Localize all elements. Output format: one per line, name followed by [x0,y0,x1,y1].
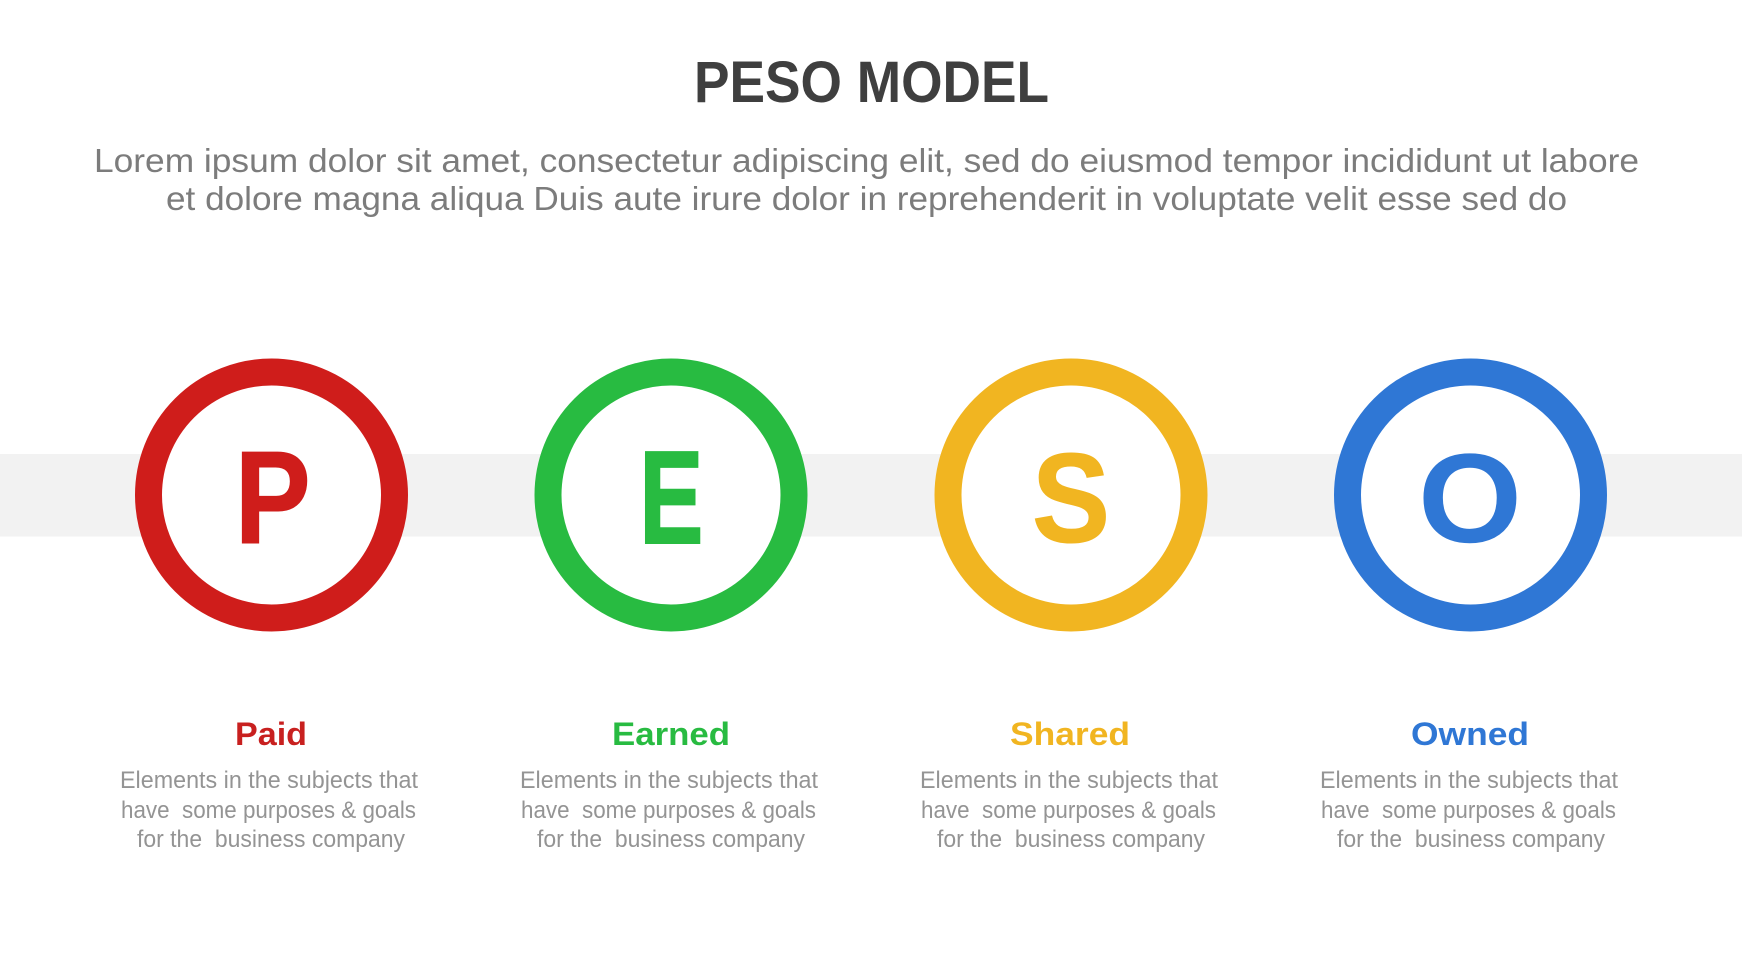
text block: paid: have some purposes & goals [121,797,416,824]
icon: O circle [1348,372,1594,618]
icon: P circle [148,372,394,618]
title: PESO MODEL [694,50,1049,115]
heading: owned: Owned [1411,716,1529,752]
subtitle text block: et dolore magna aliqua Duis aute irure dolor in reprehenderit in voluptate velit esse sed do [166,180,1567,217]
panel: owned [1320,372,1618,853]
panel: shared [920,372,1218,853]
text block: owned: Elements in the subjects that [1320,767,1618,794]
icon: P circle: P [235,424,311,571]
heading: paid: Paid [235,716,307,752]
background band [0,454,1742,536]
heading: shared: Shared [1010,716,1130,752]
heading: earned: Earned [612,716,730,752]
text block: paid [120,767,418,853]
text block: owned: have some purposes & goals [1321,797,1616,824]
text block: shared [920,767,1218,853]
subtitle text block [94,142,1639,217]
text block: owned [1320,767,1618,853]
panel: earned [520,372,818,853]
icon: S circle: S [1032,427,1110,569]
subtitle text block: Lorem ipsum dolor sit amet, consectetur adipiscing elit, sed do eiusmod tempor incididunt ut labore [94,142,1639,179]
text block: earned: Elements in the subjects that [520,767,818,794]
icon: E circle [548,372,794,618]
text block: owned: for the business company [1337,826,1605,853]
text block: shared: have some purposes & goals [921,797,1216,824]
icon: E circle: E [639,424,703,571]
text block: earned [520,767,818,853]
icon: O circle: O [1418,427,1522,569]
text block: shared: Elements in the subjects that [920,767,1218,794]
text block: earned: for the business company [537,826,805,853]
text block: paid: for the business company [137,826,405,853]
icon: S circle [948,372,1194,618]
text block: shared: for the business company [937,826,1205,853]
text block: paid: Elements in the subjects that [120,767,418,794]
text block: earned: have some purposes & goals [521,797,816,824]
panel: paid [120,372,418,853]
